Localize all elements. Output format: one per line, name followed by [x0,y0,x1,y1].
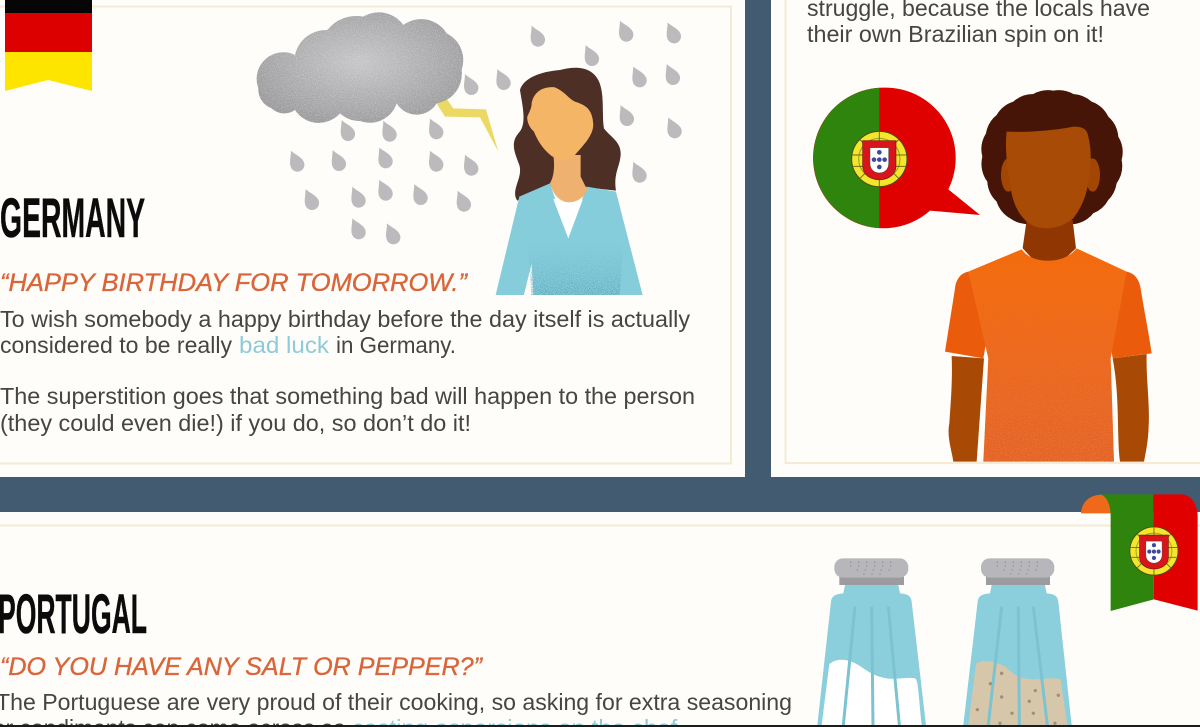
icon: lightning bolt [436,94,498,152]
icon: speech bubble with Portuguese flag [813,88,980,228]
text block: Germany explanation [0,306,695,436]
illustration: salt and pepper shakers [817,558,1072,725]
icon: salt shaker [817,558,926,725]
text block: Germany explanation: (they could even die!) if you do, so don’t do it! [0,410,471,436]
quote: happy birthday: “HAPPY BIRTHDAY FOR TOMORROW.” [0,269,469,297]
panel: Portugal [0,512,1200,727]
panel: Brazil [771,0,1200,477]
icon: Portuguese flag ribbon [1081,494,1198,611]
text block: Germany explanation: The superstition goes that something bad will happen to the person [0,383,695,409]
text block: Brazil explanation: their own Brazilian spin on it! [807,21,1104,47]
text block: Germany explanation: considered to be really [0,332,232,358]
text block: Germany explanation: in Germany. [336,332,456,358]
illustration: man with curly hair [945,90,1152,462]
icon: pepper shaker [963,558,1072,725]
text block: Germany explanation: bad luck [239,332,329,358]
panel: Portugal: PORTUGAL [0,582,147,645]
text block: Brazil explanation [807,0,1150,47]
illustration: woman in the rain [496,68,643,295]
text block: Portugal explanation [0,689,792,727]
text block: Germany explanation: To wish somebody a happy birthday before the day itself is actually [0,306,690,332]
heading: Germany: GERMANY [0,186,145,249]
icon: storm cloud [257,12,463,123]
panel: Germany [0,0,745,477]
icon: rain drops [285,18,684,247]
quote: salt or pepper: “DO YOU HAVE ANY SALT OR PEPPER?” [0,653,484,681]
text block: Portugal explanation: The Portuguese are very proud of their cooking, so asking for extra seasoning [0,689,792,715]
icon: German flag ribbon [5,0,92,91]
